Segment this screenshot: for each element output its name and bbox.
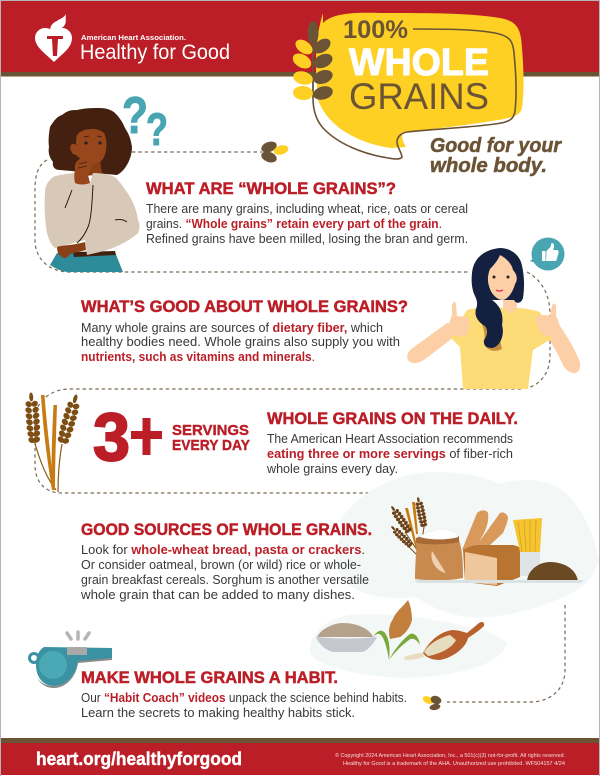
body text: There are many grains, including wheat, rice, oats or cereal: [146, 202, 468, 216]
speech bubble: 100% whole grains: GRAINS: [349, 76, 489, 117]
illustration: wooden scoop: [404, 622, 484, 660]
header band: [1, 1, 599, 76]
section: what's good about whole grains: nutrients, such as vitamins and minerals.: [81, 350, 315, 364]
heading: GOOD SOURCES OF WHOLE GRAINS.: [81, 520, 372, 539]
neck and face: [86, 160, 102, 176]
section: make whole grains a habit: Learn the secrets to making healthy habits stick.: [81, 706, 355, 720]
hair: [49, 108, 132, 175]
callout: 3+ servings every day: [93, 399, 250, 475]
icon: grain stalk: [290, 21, 335, 102]
skirt: [50, 252, 123, 272]
illustration: thinking woman: [45, 108, 140, 272]
section: what are whole grains: [146, 179, 468, 246]
baguettes: [462, 510, 508, 550]
illustration: grains, bread and pasta: [387, 496, 584, 586]
section: good sources: whole grain that can be added to many dishes.: [80, 588, 355, 602]
icon: question marks: ?: [146, 104, 168, 155]
icon: heart and torch: [35, 14, 72, 62]
logo: American Heart Association Healthy for Good: [35, 14, 230, 64]
body text: Many whole grains are sources of dietary fiber, which: [81, 321, 383, 335]
servings label: EVERY DAY: [172, 437, 250, 454]
heading: WHOLE GRAINS ON THE DAILY.: [267, 409, 518, 428]
speech bubble: 100% whole grains: [290, 13, 524, 159]
right arm: [548, 320, 580, 373]
servings label: SERVINGS: [172, 422, 249, 439]
lower hand: [57, 242, 86, 258]
icon: seeds 2: [422, 694, 443, 711]
hair shadow: [478, 316, 502, 351]
icon: seeds 1: [260, 140, 289, 164]
section: what are whole grains: grains. “Whole grains” retain every part of the grain.: [146, 217, 442, 231]
bread loaf: [463, 545, 522, 586]
hair: [472, 248, 524, 348]
icon: question marks: ?: [122, 87, 148, 145]
icon: wheat stalks: [23, 392, 84, 492]
background blobs behind food: [310, 472, 599, 678]
section: what's good about whole grains: healthy bodies need. Whole grains also supply you with: [81, 335, 400, 349]
tagline: [430, 135, 562, 177]
shirt: [450, 307, 553, 389]
icon: thumbs-up bubble: [530, 238, 564, 270]
hand on chin: [74, 158, 92, 184]
dashed connector paths: [35, 152, 565, 702]
wheat and bag: [387, 496, 463, 580]
bubble text: 100%: [343, 16, 408, 44]
shadow: [414, 580, 584, 583]
body text: Our “Habit Coach” videos unpack the science behind habits.: [81, 691, 407, 705]
heading: WHAT’S GOOD ABOUT WHOLE GRAINS?: [81, 297, 408, 316]
big number: 3: [93, 399, 130, 475]
section: whole grains on the daily: eating three or more servings of fiber-rich: [267, 447, 513, 461]
section: good sources: grain breakfast cereals. Sorghum is another versatile: [81, 573, 369, 587]
plus sign: [131, 418, 162, 455]
footer copyright: © Copyright 2024 American Heart Association, Inc., a 501(c)(3) not-for-profit. All rights reserved.: [335, 752, 565, 759]
heading: MAKE WHOLE GRAINS A HABIT.: [81, 668, 338, 687]
sweater: [45, 173, 140, 255]
section: whole grains on the daily: [266, 409, 518, 476]
logo text: American Heart Association.: [81, 33, 186, 42]
icon: whistle: [30, 632, 112, 688]
illustration: sorghum plant: [373, 600, 420, 660]
section: make whole grains a habit: [81, 668, 407, 720]
yellow bubble: [316, 13, 524, 148]
footer band: [1, 738, 599, 775]
neck: [503, 297, 517, 314]
body text: The American Heart Association recommends: [267, 432, 513, 446]
pasta and cup: [513, 518, 542, 576]
footer url: heart.org/healthyforgood: [36, 749, 242, 769]
illustration: bowl: [316, 623, 377, 652]
section: good sources: [80, 520, 372, 602]
left arm: [407, 323, 462, 363]
dark bread: [527, 562, 578, 582]
section: whole grains on the daily: whole grains every day.: [266, 462, 398, 476]
footer copyright: [335, 752, 565, 767]
servings label: [172, 422, 250, 454]
tagline: whole body.: [430, 155, 547, 177]
illustration: woman thumbs up: [407, 248, 580, 389]
section: what are whole grains: Refined grains have been milled, losing the bran and germ.: [146, 232, 468, 246]
logo: American Heart Association Healthy for Good: Healthy for Good: [80, 41, 230, 64]
face: [488, 255, 517, 300]
section: what's good about whole grains: [81, 297, 408, 364]
tagline: Good for your: [430, 135, 562, 157]
icon: question marks: [122, 87, 168, 155]
heading: WHAT ARE “WHOLE GRAINS”?: [146, 179, 396, 198]
body text: Look for whole-wheat bread, pasta or crackers .: [81, 543, 365, 557]
hands: [447, 302, 469, 336]
section: good sources: Or consider oatmeal, brown (or wild) rice or whole-: [81, 558, 361, 572]
footer copyright: Healthy for Good is a trademark of the AHA. Unauthorized use prohibited. WF504157 4/24: [343, 761, 565, 767]
bubble outline: [313, 29, 516, 159]
speech bubble: 100% whole grains: WHOLE: [349, 42, 489, 84]
sweater folds: [65, 185, 127, 243]
